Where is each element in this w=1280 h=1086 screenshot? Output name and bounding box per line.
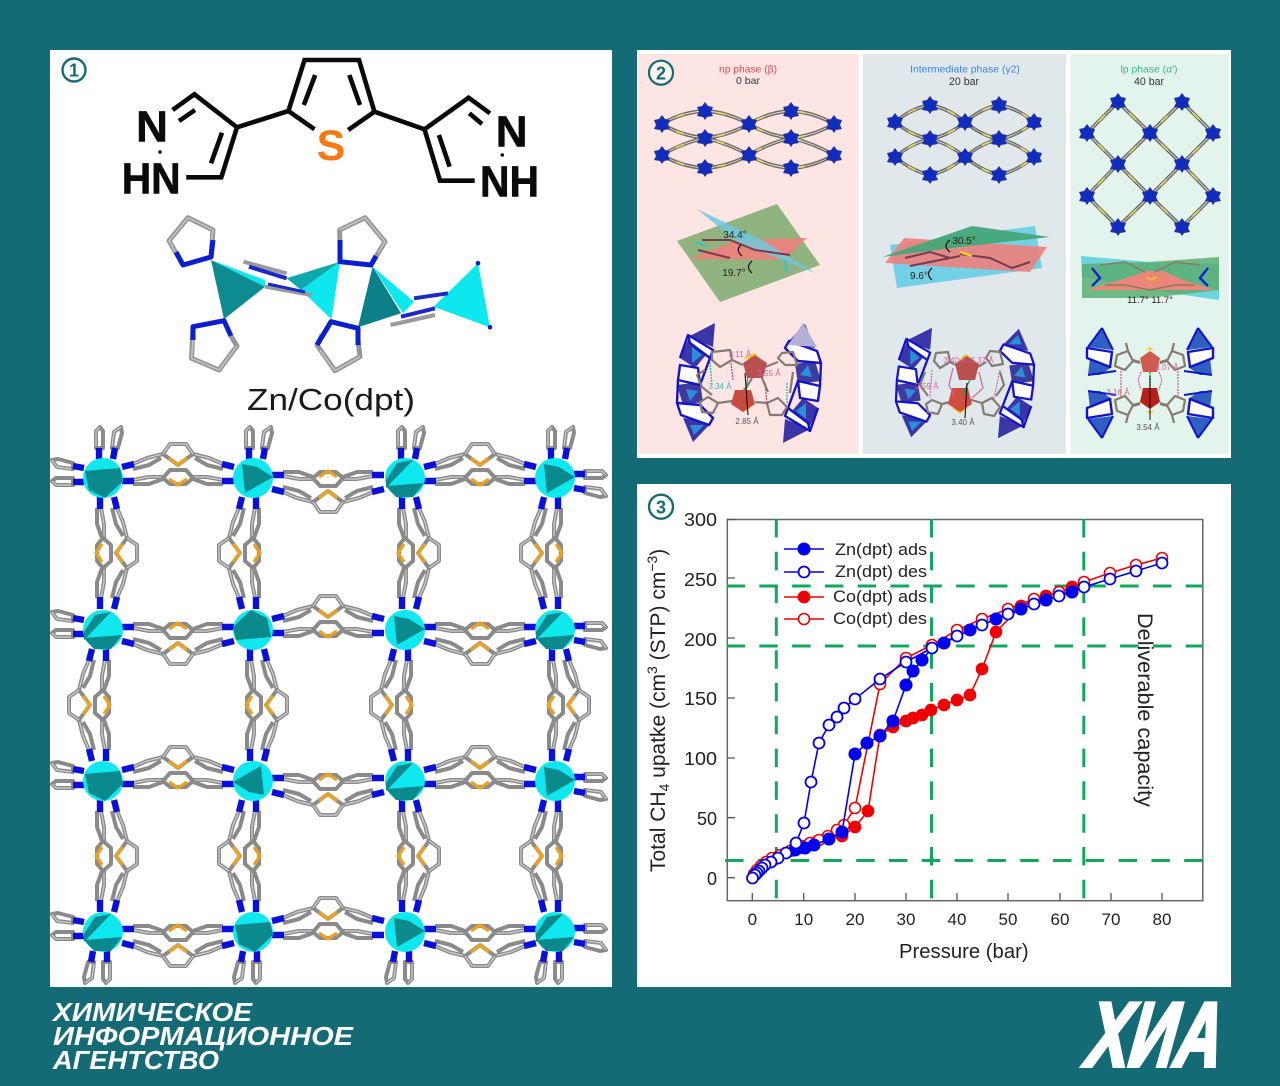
y axis title: )	[647, 549, 670, 556]
annotation: deliverable capacity: Deliverable capacity	[1133, 613, 1156, 808]
series: Co(dpt) desorption	[748, 552, 1168, 880]
sub-panel: lp phase	[1070, 54, 1229, 454]
chart frame and ticks	[727, 520, 1203, 901]
framework lattice	[52, 427, 606, 983]
series: Zn(dpt) desorption	[747, 558, 1168, 884]
panel 2: phases under pressure	[637, 50, 1231, 458]
y axis labels	[684, 510, 717, 889]
intermediate lattice	[887, 96, 1042, 184]
intermediate dihedral planes: 30.5°	[952, 236, 976, 247]
structural formula of dpt ligand: NH	[480, 158, 539, 207]
sub-panel: np phase	[638, 54, 858, 454]
intermediate phase heading: Intermediate phase (γ2)	[910, 65, 1020, 76]
x axis labels: 70	[1102, 910, 1120, 929]
x axis labels: 10	[794, 910, 813, 929]
panel 3: isotherm chart	[637, 484, 1231, 987]
badge 2	[649, 61, 673, 85]
structural formula of dpt ligand: HN	[122, 154, 181, 203]
y axis title: upatke (cm	[647, 674, 670, 784]
intermediate dihedral planes: 9.6°	[910, 271, 928, 282]
series: Co(dpt) adsorption	[752, 581, 1078, 878]
lp pore close-up	[1087, 328, 1213, 438]
legend: Co(dpt) ads	[833, 588, 927, 606]
lp pore close-up: 3.54 Å	[1136, 423, 1160, 432]
y axis labels: 100	[684, 749, 717, 769]
y axis labels: 300	[684, 510, 717, 530]
green dashed guide lines	[725, 519, 1203, 901]
structural formula of dpt ligand: N	[496, 108, 527, 157]
y axis title: −3	[644, 555, 660, 572]
badge 1	[62, 58, 86, 82]
y axis labels: 250	[684, 570, 717, 590]
footer: agency name: ХИМИЧЕСКОЕ	[51, 999, 253, 1027]
panel 1: ligand and framework structure	[50, 50, 612, 987]
np dihedral planes	[677, 204, 820, 302]
np lattice	[654, 102, 842, 177]
intermediate pore close-up: 3.40 Å	[943, 356, 967, 365]
badge 1: 1	[69, 60, 79, 80]
y axis title: 3	[644, 666, 660, 674]
np pore close-up: 3.11 Å	[729, 350, 752, 359]
intermediate dihedral planes	[882, 226, 1050, 288]
y axis labels: 0	[707, 869, 717, 889]
legend: Co(dpt) des	[833, 610, 927, 628]
legend	[784, 541, 927, 628]
np phase heading: np phase (β)	[719, 65, 777, 76]
footer: agency name: ИНФОРМАЦИОННОЕ	[53, 1023, 354, 1051]
x axis title: Pressure (bar)	[899, 941, 1029, 963]
label Zn/Co(dpt): Zn/Co(dpt)	[247, 382, 415, 417]
np pore close-up: 3.34 Å	[708, 382, 732, 391]
badge 3	[649, 495, 673, 519]
intermediate pore close-up: 3.40 Å	[951, 418, 975, 427]
lp phase heading	[1120, 65, 1178, 88]
intermediate phase heading: 20 bar	[949, 76, 979, 88]
legend: Zn(dpt) ads	[835, 541, 927, 559]
series: Zn(dpt) adsorption	[752, 586, 1078, 878]
x axis labels	[748, 910, 1171, 929]
np dihedral planes: 19.7°	[722, 268, 746, 279]
np dihedral planes: 34.4°	[723, 230, 747, 241]
y axis title: 4	[656, 783, 672, 791]
np phase heading: 0 bar	[736, 75, 760, 87]
x axis labels: 40	[948, 910, 966, 929]
intermediate phase heading	[910, 65, 1020, 88]
y axis title: (STP) cm	[647, 572, 670, 666]
intermediate pore close-up: 3.37 Å	[970, 356, 994, 365]
lp phase heading: 40 bar	[1134, 76, 1164, 88]
y axis labels: 150	[684, 689, 717, 709]
np pore close-up	[677, 323, 821, 443]
lp dihedral planes: 11.7° 11.7°	[1127, 295, 1173, 306]
lp dihedral planes	[1081, 256, 1219, 306]
x axis labels: 50	[999, 910, 1017, 929]
y axis labels: 50	[697, 809, 717, 829]
structural formula of dpt ligand: S	[317, 122, 345, 170]
structural formula of dpt ligand	[122, 60, 539, 207]
x axis labels: 60	[1051, 910, 1069, 929]
lp phase heading: lp phase (α′)	[1120, 65, 1178, 76]
3D coordination fragment	[169, 218, 492, 371]
lp pore close-up: 3.07 Å	[1155, 363, 1179, 372]
structural formula of dpt ligand: N	[136, 103, 168, 152]
sub-panel: intermediate phase	[863, 54, 1066, 454]
x axis labels: 0	[748, 910, 757, 929]
x axis labels: 20	[846, 910, 864, 929]
badge 3: 3	[656, 498, 666, 518]
lp lattice	[1079, 93, 1221, 236]
intermediate pore close-up	[896, 328, 1034, 438]
x axis labels: 80	[1153, 910, 1171, 929]
y axis title: Total CH	[647, 791, 670, 872]
footer: agency name: АГЕНТСТВО	[52, 1047, 219, 1075]
y axis labels: 200	[684, 630, 717, 650]
badge 2: 2	[656, 64, 666, 84]
intermediate pore close-up: 2.59 Å	[915, 382, 939, 391]
np phase heading	[719, 65, 777, 87]
lp pore close-up: 3.16 Å	[1106, 388, 1130, 397]
np pore close-up: 3.55 Å	[757, 369, 781, 378]
x axis labels: 30	[897, 910, 915, 929]
footer: agency name	[51, 999, 354, 1075]
legend: Zn(dpt) des	[835, 563, 927, 581]
np pore close-up: 2.85 Å	[735, 417, 759, 426]
